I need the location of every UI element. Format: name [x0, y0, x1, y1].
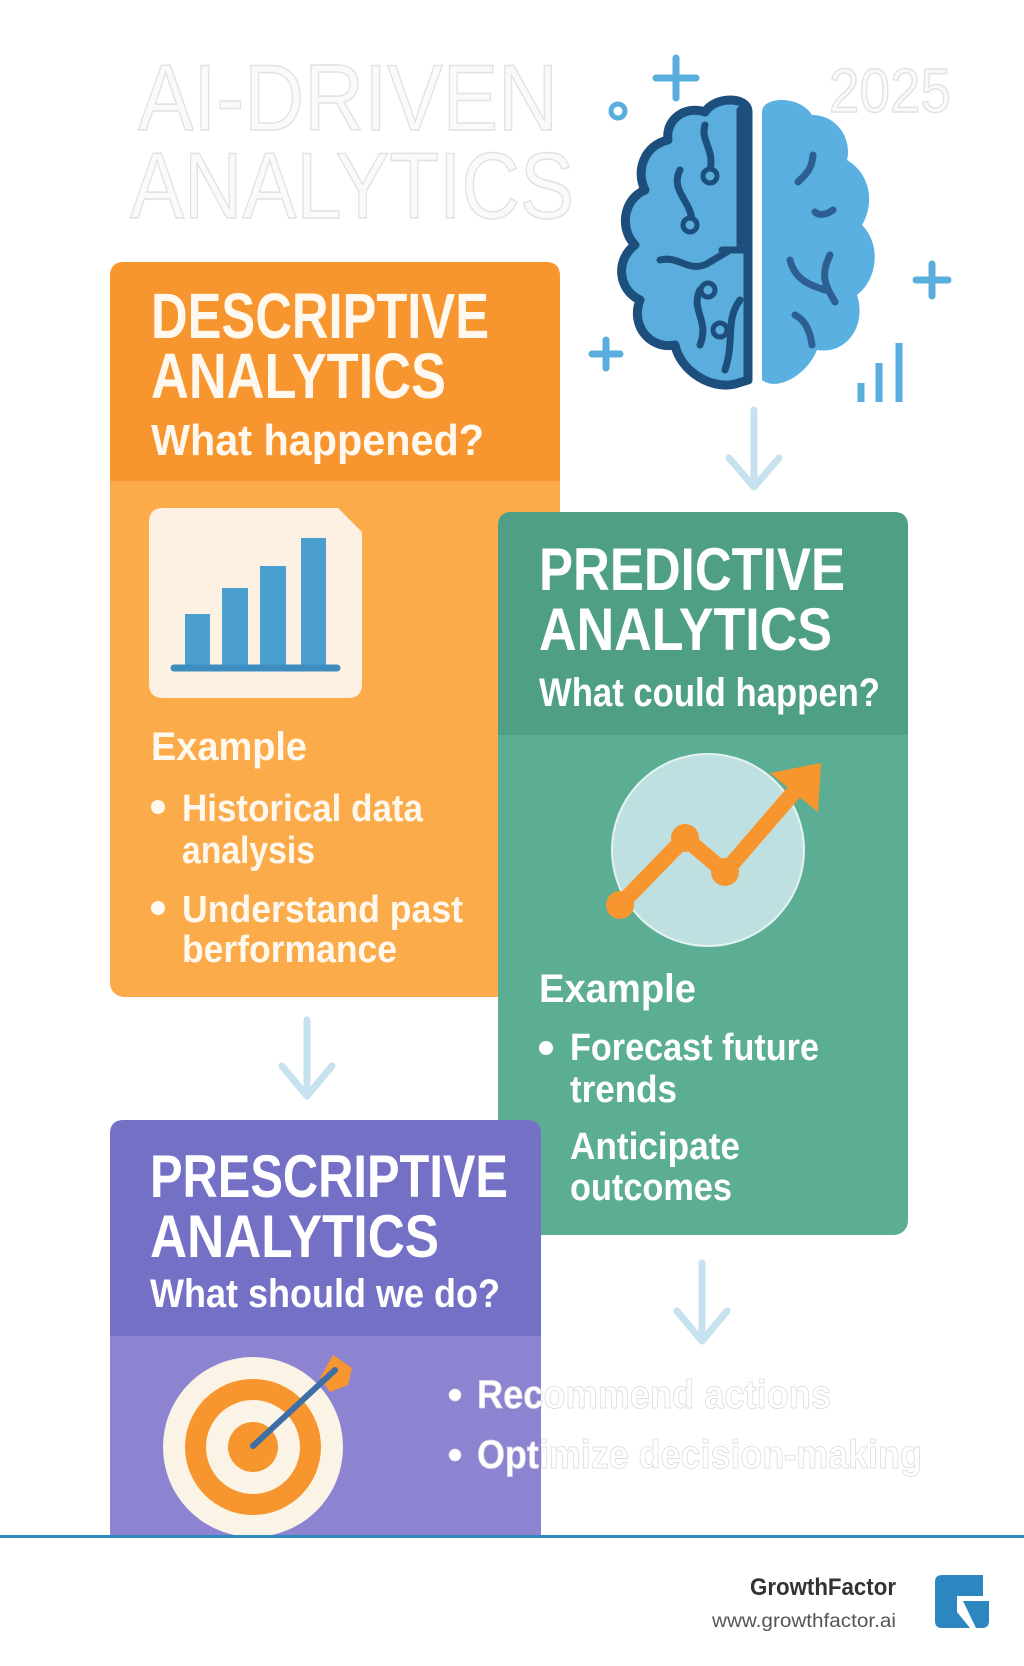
heading: descriptive: ANALYTICS: [151, 340, 446, 412]
text: predictive examples: Forecast future: [570, 1027, 819, 1069]
text: descriptive examples: analysis: [182, 830, 315, 872]
text: predictive examples: Example: [539, 967, 696, 1011]
text: predictive examples: [539, 967, 819, 1209]
icon: bar chart card: [149, 508, 362, 698]
text: descriptive examples: Example: [151, 725, 307, 769]
heading: prescriptive: ANALYTICS: [150, 1203, 439, 1270]
heading: predictive: [539, 536, 880, 715]
icon: decorative pluses and dots: [592, 58, 948, 402]
icon: target with arrow: [163, 1355, 352, 1537]
text: predictive examples: trends: [570, 1069, 677, 1111]
year label: 2025: [829, 57, 951, 126]
icon: trend chart: [606, 754, 821, 946]
text: descriptive examples: berformance: [182, 929, 397, 971]
panel: prescriptive analytics: [110, 1120, 541, 1537]
heading: prescriptive: [150, 1143, 508, 1316]
arrow: descriptive to prescriptive: [282, 1020, 332, 1096]
icon: logo: [935, 1575, 989, 1628]
heading: descriptive: What happened?: [151, 416, 484, 465]
title: ANALYTICS: [130, 133, 574, 238]
text: prescriptive bullets: Optimize decision-making: [477, 1433, 922, 1477]
panel: descriptive analytics: [110, 262, 560, 997]
text: predictive examples: outcomes: [570, 1167, 732, 1209]
heading: descriptive: [151, 280, 489, 465]
heading: predictive: ANALYTICS: [539, 596, 832, 663]
heading: prescriptive: PRESCRIPTIVE: [150, 1143, 508, 1210]
heading: descriptive: DESCRIPTIVE: [151, 280, 489, 352]
title: [130, 45, 574, 238]
text: descriptive examples: Understand past: [182, 889, 463, 931]
panel: predictive analytics: [498, 512, 908, 1235]
text: descriptive examples: [151, 725, 463, 971]
text: prescriptive bullets: [449, 1373, 922, 1477]
icon: brain: [622, 100, 875, 385]
text: descriptive examples: Historical data: [182, 788, 424, 830]
title: AI-DRIVEN: [138, 45, 558, 150]
footer: brand text: GrowthFactor: [750, 1574, 896, 1601]
arrow: brain to predictive: [729, 410, 779, 487]
footer: brand text: [711, 1574, 896, 1632]
heading: predictive: PREDICTIVE: [539, 536, 845, 603]
heading: prescriptive: What should we do?: [150, 1272, 500, 1316]
arrow: predictive down: [677, 1263, 727, 1341]
footer: brand text: www.growthfactor.ai: [711, 1611, 896, 1632]
text: prescriptive bullets: Recommend actions: [477, 1373, 831, 1417]
text: predictive examples: Anticipate: [570, 1126, 740, 1168]
heading: predictive: What could happen?: [539, 671, 880, 715]
